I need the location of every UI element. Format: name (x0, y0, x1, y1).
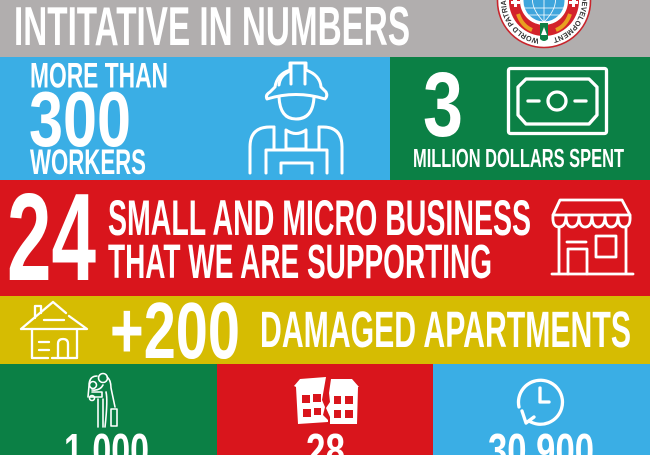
panel: hours (433, 364, 650, 455)
businesses text (108, 190, 531, 289)
panel: workers (0, 56, 390, 182)
workers text (29, 56, 168, 182)
panel: damaged apartments (0, 286, 650, 375)
icon: clock (518, 380, 562, 424)
workers text: MORE THAN (30, 56, 168, 96)
icon: construction worker (250, 63, 342, 173)
header band (0, 0, 650, 57)
panel: displaced people (0, 364, 217, 455)
+200: +200 (110, 286, 240, 375)
icon: house (21, 302, 87, 358)
big number 24: 24 (7, 169, 96, 307)
big number 3: 3 (423, 54, 463, 156)
icon: banknote (508, 68, 606, 134)
panel: destroyed buildings (217, 364, 434, 455)
icon: woman with child and suitcase (88, 374, 117, 427)
panel: dollars spent (390, 54, 650, 180)
icon: cracked building (294, 377, 359, 424)
icon: storefront (552, 200, 633, 274)
workers text: 300 (29, 75, 131, 163)
workers text: WORKERS (30, 143, 146, 182)
panel: small businesses (0, 169, 650, 307)
